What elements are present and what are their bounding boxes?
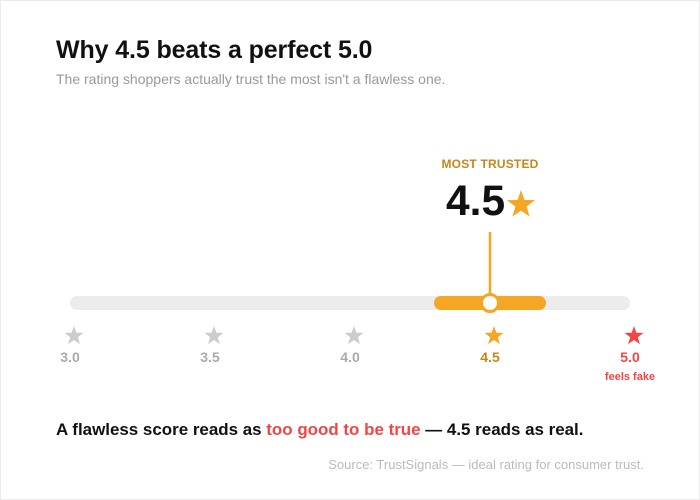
rating scale xyxy=(70,232,630,313)
icon: star xyxy=(624,326,644,344)
subtitle: The rating shoppers actually trust the most isn't a flawless one. xyxy=(56,71,445,87)
label: 4.0 xyxy=(340,349,360,365)
note: feels fake: feels fake xyxy=(605,371,655,383)
trusted range xyxy=(434,296,546,310)
marker xyxy=(480,293,500,313)
takeaway: A flawless score reads as too good to be true — 4.5 reads as real. xyxy=(56,420,583,439)
callout value: 4.5 xyxy=(446,178,505,225)
label: 3.5 xyxy=(200,349,220,365)
icon: star xyxy=(344,326,364,344)
tick: 4.5 xyxy=(480,326,504,365)
title: Why 4.5 beats a perfect 5.0 xyxy=(56,36,372,64)
tick: 3.5 xyxy=(200,326,224,365)
icon: star xyxy=(64,326,84,344)
tick: 4.0 xyxy=(340,326,364,365)
track xyxy=(70,296,630,310)
source: Source: TrustSignals — ideal rating for consumer trust. xyxy=(328,457,644,472)
icon: star xyxy=(204,326,224,344)
label: 4.5 xyxy=(480,349,500,365)
connector line xyxy=(488,232,492,294)
icon: large star xyxy=(507,190,535,217)
tick: 5.0 xyxy=(605,326,655,383)
icon: star xyxy=(484,326,504,344)
callout: most trusted xyxy=(441,157,539,225)
tick: 3.0 xyxy=(60,326,84,365)
label: 3.0 xyxy=(60,349,80,365)
callout label: MOST TRUSTED xyxy=(441,157,539,171)
label: 5.0 xyxy=(620,349,640,365)
